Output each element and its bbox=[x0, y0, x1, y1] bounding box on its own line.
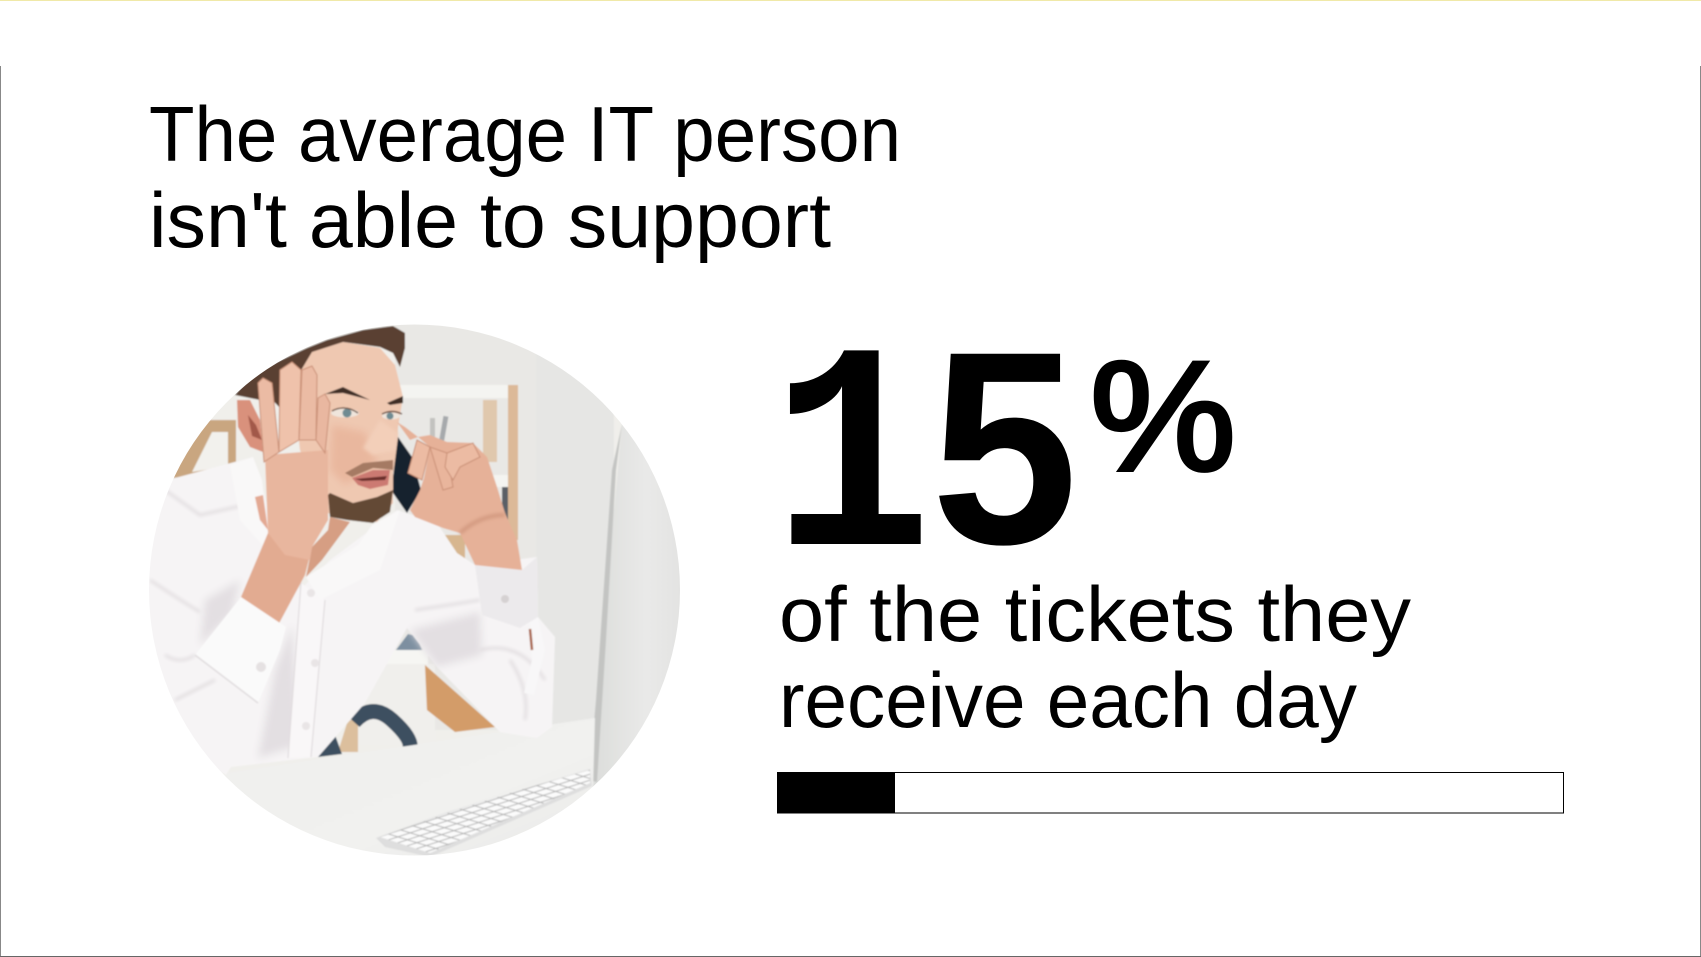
eyebrows bbox=[325, 387, 370, 400]
neck bbox=[306, 517, 350, 577]
left shirt cuff bbox=[195, 597, 286, 703]
collar bbox=[238, 472, 262, 509]
progress bar: 15 percent filled bbox=[777, 772, 1564, 813]
ear bbox=[237, 400, 263, 452]
big statistic: 15%: 1 bbox=[772, 300, 932, 633]
face bbox=[235, 326, 405, 523]
raised left hand and forearm bbox=[241, 362, 330, 629]
monitor bbox=[592, 426, 680, 786]
big statistic: 15%: % bbox=[1090, 330, 1236, 504]
statistic description bbox=[779, 570, 1411, 744]
photo: stressed IT worker on the phone bbox=[149, 324, 680, 856]
desk bbox=[403, 718, 596, 782]
title bbox=[149, 90, 901, 264]
eyes bbox=[331, 408, 359, 418]
right hand on phone bbox=[397, 422, 522, 570]
keyboard bbox=[376, 769, 592, 857]
phone bbox=[393, 437, 421, 513]
fingers bbox=[258, 378, 279, 462]
moustache bbox=[345, 460, 393, 477]
big statistic: 15%: 5 bbox=[931, 295, 1078, 602]
hair bbox=[235, 326, 405, 410]
nose bbox=[363, 434, 400, 455]
office background bbox=[174, 324, 622, 776]
shirt bbox=[130, 457, 555, 775]
mouth bbox=[352, 470, 390, 489]
right shirt cuff bbox=[475, 557, 538, 628]
big statistic: 15% bbox=[772, 295, 1236, 633]
statistic description: receive each day bbox=[779, 656, 1357, 744]
title: isn't able to support bbox=[149, 176, 831, 264]
title: The average IT person bbox=[149, 90, 901, 178]
beard bbox=[328, 490, 393, 523]
statistic description: of the tickets they bbox=[779, 570, 1411, 658]
